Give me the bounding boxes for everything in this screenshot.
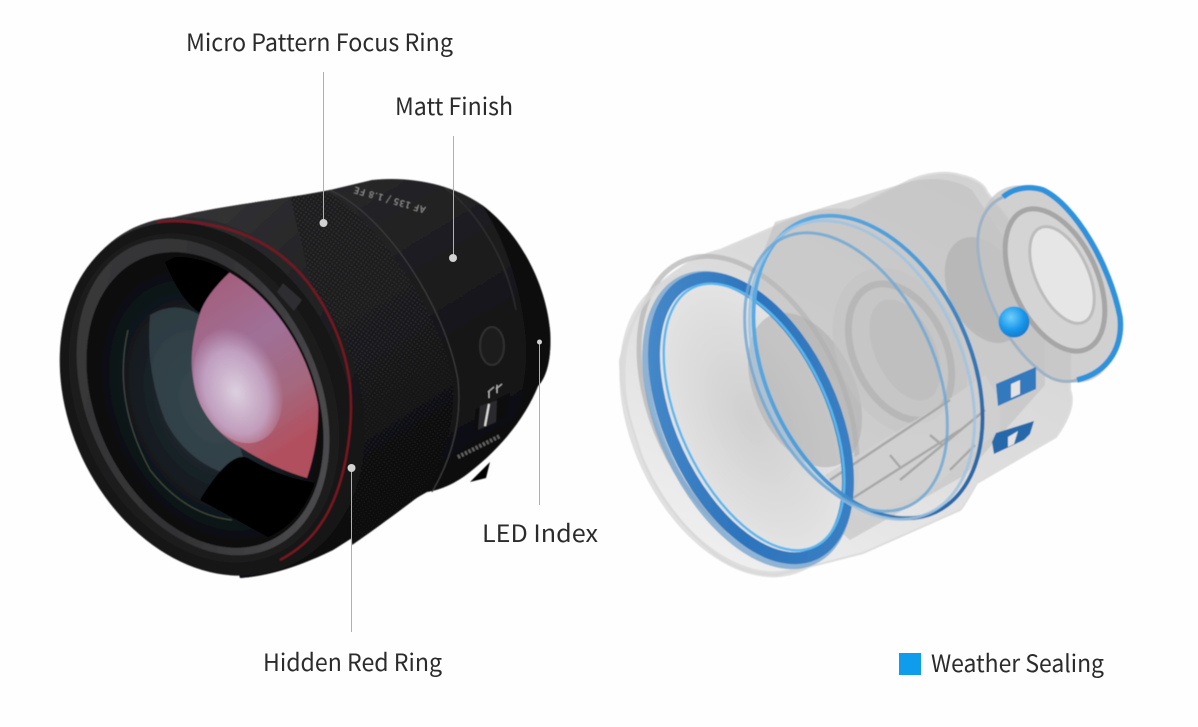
label: LED index: LED Index [482,514,598,549]
rear flange shade [482,205,550,438]
pink reflection [192,272,318,478]
inner black wall [41,213,369,587]
legend text: Weather Sealing [931,644,1104,679]
front band outer [5,167,421,625]
blue seal: middle ring [704,179,1028,555]
rear mount [948,163,1148,405]
blue seal: front ring [603,242,893,598]
outer glass rim [578,240,892,610]
inner tube [745,179,1045,540]
label: micro pattern focus ring: Micro Pattern Focus Ring [186,23,453,58]
leader: micro pattern focus ring [320,72,328,227]
label: matt finish: Matt Finish [395,87,513,122]
leader: matt finish [449,136,457,262]
AF/MF switch panel [458,384,510,482]
lens name engraving: AF 135 / 1.8 FE [351,184,427,217]
gray rim [28,198,378,596]
front barrel [157,190,453,578]
AF button [480,327,504,365]
ghost body [620,173,1072,575]
legend swatch [899,653,921,675]
front lens element [616,250,886,586]
photo: black lens [58,178,552,579]
leader: LED index [537,340,542,505]
hidden red ring [157,221,351,560]
front ring dark [4,174,410,624]
rear ring pale side [978,197,1077,382]
label: hidden red ring: Hidden Red Ring [263,643,442,678]
internal mechanics [825,375,1000,520]
focus ring shading [290,192,453,545]
mid elements [725,295,885,485]
glass [48,220,366,580]
micro pattern focus ring [290,192,453,545]
legend: weather sealing [899,644,1104,679]
photo: transparent lens cutaway [578,163,1148,610]
blue seal: rear ring [1003,188,1120,380]
barrel silhouette [157,179,550,578]
seam between barrel sections [330,190,459,492]
gray hood band [595,222,901,588]
lens hood notch [277,283,302,311]
blue LED index ball [998,306,1030,338]
mount shoulder highlight [445,188,516,310]
blue switch seal lower [992,421,1034,454]
leader: hidden red ring [348,464,356,632]
inner dark ring [17,189,391,607]
blue switch seal upper [996,367,1036,406]
